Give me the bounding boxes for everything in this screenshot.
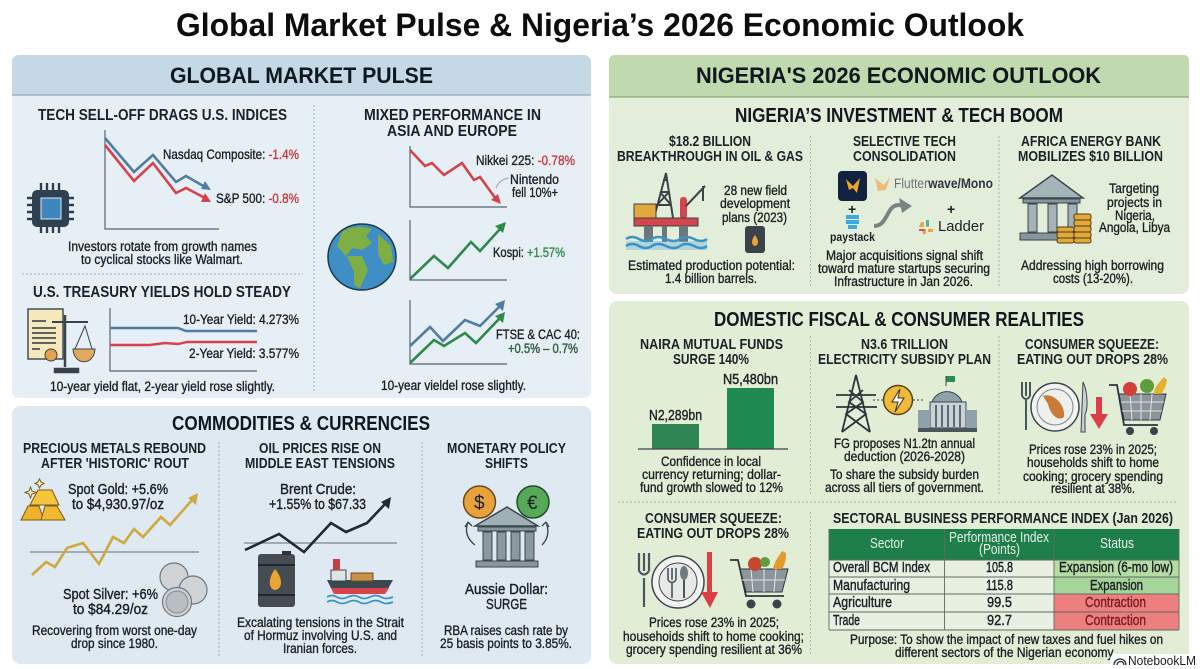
icon: plate, arrow and cart bottom bbox=[639, 551, 788, 608]
line chart: gold and silver bbox=[30, 493, 199, 575]
text: prices rose top: resilient at 38%. bbox=[1051, 481, 1135, 496]
text: fg proposes: deduction (2026-2028) bbox=[844, 449, 965, 464]
text: prices rose top: Prices rose 23% in 2025; bbox=[1029, 442, 1157, 457]
text: yield note: 10-year yield flat, 2-year yield rose slightly. bbox=[50, 379, 275, 394]
watermark: notebooklm: NotebookLM bbox=[1128, 653, 1196, 668]
icon: small barrel bbox=[745, 226, 765, 253]
label: aussie dollar bbox=[465, 581, 548, 613]
label: 2-year yield: 2-Year Yield: 3.577% bbox=[189, 345, 299, 361]
label: spot silver bbox=[63, 586, 158, 618]
line chart: nikkei bbox=[410, 146, 509, 207]
heading: tech consolidation: SELECTIVE TECH bbox=[853, 134, 956, 150]
label: spot gold: to $4,930.97/oz bbox=[72, 496, 164, 513]
icon: bank with coins bbox=[1020, 175, 1091, 243]
label: kospi: Kospi: +1.57% bbox=[493, 244, 565, 260]
text: fg proposes: FG proposes N1.2tn annual bbox=[834, 436, 975, 451]
label: brent crude bbox=[269, 481, 366, 513]
icon: plate, arrow and cart top bbox=[1022, 377, 1167, 435]
icon: bank with currency coins bbox=[464, 486, 549, 567]
nigeria outlook header: NIGERIA'S 2026 ECONOMIC OUTLOOK bbox=[696, 63, 1101, 88]
logos: fintech acquisitions: Flutterwave/Mono bbox=[894, 176, 993, 191]
heading: naira mutual funds bbox=[640, 337, 783, 368]
table: sectoral business performance: Performance Index bbox=[949, 530, 1050, 546]
text: targeting: projects in bbox=[1107, 195, 1162, 210]
text: fg proposes: across all tiers of government. bbox=[825, 480, 984, 495]
label: nintendo: fell 10%+ bbox=[512, 185, 558, 200]
label: spot gold: Spot Gold: +5.6% bbox=[68, 481, 168, 498]
text: rba: 25 basis points to 3.85%. bbox=[440, 636, 572, 651]
text: field plans: development bbox=[720, 196, 790, 211]
logos: fintech acquisitions bbox=[830, 171, 993, 244]
bar chart: naira funds: N5,480bn bbox=[723, 372, 778, 388]
text: fg proposes: To share the subsidy burden bbox=[830, 467, 979, 482]
global market pulse header bbox=[12, 55, 591, 95]
heading: precious metals: AFTER 'HISTORIC' ROUT bbox=[41, 456, 189, 472]
icon: oil rig bbox=[626, 173, 707, 250]
heading: africa energy bank: MOBILIZES $10 BILLION bbox=[1018, 149, 1163, 165]
heading: electricity subsidy: ELECTRICITY SUBSIDY PLAN bbox=[818, 352, 991, 368]
text: recovering: Recovering from worst one-day bbox=[32, 623, 197, 638]
heading: treasury yields: U.S. TREASURY YIELDS HOLD STEADY bbox=[33, 284, 291, 301]
heading: electricity subsidy: N3.6 TRILLION bbox=[861, 337, 948, 353]
text: prices rose bottom: Prices rose 23% in 2025; bbox=[649, 615, 779, 630]
icon: oil barrel bbox=[258, 551, 295, 607]
text: production potential: Estimated production potential: bbox=[628, 258, 795, 273]
label: nikkei: Nikkei 225: -0.78% bbox=[476, 152, 575, 168]
text: investors rotate: Investors rotate from growth names bbox=[68, 239, 257, 254]
table: sectoral business performance: 92.7 bbox=[987, 613, 1012, 629]
panel: commodities and currencies bbox=[12, 406, 591, 664]
heading: electricity subsidy bbox=[818, 337, 991, 368]
table: sectoral business performance: Manufacturing bbox=[833, 578, 910, 594]
text: acquisitions: Major acquisitions signal shift bbox=[826, 248, 983, 263]
heading: mixed performance: ASIA AND EUROPE bbox=[387, 123, 517, 140]
text: fg proposes bbox=[825, 436, 984, 495]
bar chart: naira funds: N2,289bn bbox=[649, 408, 702, 424]
text: strait of hormuz bbox=[237, 615, 404, 656]
icon: document and scales bbox=[28, 309, 95, 372]
icon: pylon, bolt and capitol bbox=[836, 375, 977, 432]
line chart: us indices bbox=[105, 130, 219, 229]
heading: monetary policy bbox=[447, 441, 566, 472]
text: borrowing costs bbox=[1021, 258, 1164, 286]
heading: investment and tech boom: NIGERIA’S INVESTMENT & TECH BOOM bbox=[735, 105, 1063, 127]
table: sectoral business performance: Agriculture bbox=[833, 595, 892, 611]
text: rba bbox=[440, 623, 572, 651]
text: confidence bbox=[640, 454, 783, 495]
text: investors rotate bbox=[68, 239, 257, 267]
heading: mixed performance: MIXED PERFORMANCE IN bbox=[364, 107, 541, 124]
table: sectoral business performance: Expansion (6-mo low) bbox=[1059, 560, 1173, 576]
heading: tech sell-off: TECH SELL-OFF DRAGS U.S. INDICES bbox=[38, 107, 287, 124]
panel: domestic fiscal and consumer realities bbox=[609, 301, 1189, 664]
table: sectoral business performance: Trade bbox=[833, 613, 860, 629]
heading: precious metals: PRECIOUS METALS REBOUND bbox=[23, 441, 206, 457]
label: aussie dollar: SURGE bbox=[486, 596, 527, 613]
table: sectoral business performance: 115.8 bbox=[986, 578, 1013, 594]
heading: naira mutual funds: NAIRA MUTUAL FUNDS bbox=[640, 337, 783, 353]
heading: naira mutual funds: SURGE 140% bbox=[673, 352, 749, 368]
label: s&p 500: S&P 500: -0.8% bbox=[216, 190, 299, 206]
label: brent crude: +1.55% to $67.33 bbox=[269, 496, 366, 513]
text: purpose: different sectors of the Nigerian economy. bbox=[895, 645, 1116, 660]
text: strait of hormuz: Excalating tensions in the Strait bbox=[237, 615, 404, 630]
text: prices rose top: cooking; grocery spending bbox=[1023, 469, 1163, 484]
heading: oil and gas: BREAKTHROUGH IN OIL & GAS bbox=[617, 149, 803, 165]
text: confidence: Confidence in local bbox=[661, 454, 761, 469]
heading: oil prices: OIL PRICES RISE ON bbox=[259, 441, 381, 457]
heading: consumer squeeze bottom: CONSUMER SQUEEZE: bbox=[645, 511, 782, 527]
text: targeting: Angola, Libya bbox=[1099, 220, 1170, 235]
heading: africa energy bank bbox=[1018, 134, 1163, 165]
text: acquisitions: toward mature startups securing bbox=[818, 261, 990, 276]
text: field plans: plans (2023) bbox=[722, 210, 787, 225]
bar chart: naira funds bbox=[638, 372, 788, 449]
table: sectoral business performance: 99.5 bbox=[987, 595, 1012, 611]
text: borrowing costs: Addressing high borrowing bbox=[1021, 258, 1164, 273]
heading: precious metals bbox=[23, 441, 206, 472]
table: sectoral business performance: Contraction bbox=[1085, 613, 1146, 629]
label: ftse and cac bbox=[496, 327, 580, 356]
heading: mixed performance bbox=[364, 107, 541, 140]
table: sectoral business performance: 105.8 bbox=[986, 560, 1013, 576]
text: production potential bbox=[628, 258, 795, 286]
panel: nigeria investment and tech boom bbox=[609, 55, 1189, 294]
label: nasdaq: Nasdaq Composite: -1.4% bbox=[163, 146, 299, 162]
text: investors rotate: to cyclical stocks like Walmart. bbox=[81, 252, 243, 267]
icon: microchip bbox=[27, 183, 74, 233]
text: prices rose bottom: grocery spending resilient at 36% bbox=[626, 642, 802, 657]
heading: oil and gas bbox=[617, 134, 803, 165]
panel: global market pulse bbox=[12, 55, 591, 398]
text: vieldel note: 10-year vieldel rose slightly. bbox=[381, 378, 526, 393]
heading: africa energy bank: AFRICA ENERGY BANK bbox=[1021, 134, 1161, 150]
label: spot gold bbox=[68, 481, 168, 513]
heading: oil prices: MIDDLE EAST TENSIONS bbox=[245, 456, 395, 472]
table: sectoral business performance: Contraction bbox=[1085, 595, 1146, 611]
label: nintendo: Nintendo bbox=[510, 172, 559, 187]
logos: fintech acquisitions: + bbox=[848, 201, 856, 217]
table: sectoral business performance: (Points) bbox=[979, 542, 1020, 558]
text: purpose: Purpose: To show the impact of new taxes and fuel hikes on bbox=[850, 632, 1163, 647]
heading: tech consolidation bbox=[853, 134, 956, 165]
heading: commodities: COMMODITIES & CURRENCIES bbox=[172, 413, 430, 435]
text: production potential: 1.4 billion barrels. bbox=[665, 271, 757, 286]
text: prices rose bottom bbox=[623, 615, 804, 657]
label: nintendo bbox=[510, 172, 559, 200]
table: sectoral business performance: Expansion bbox=[1090, 578, 1143, 594]
heading: consumer squeeze top bbox=[1017, 337, 1168, 368]
line chart: brent bbox=[244, 497, 397, 552]
text: recovering: drop since 1980. bbox=[71, 636, 158, 651]
label: spot silver: Spot Silver: +6% bbox=[63, 586, 158, 603]
heading: oil prices bbox=[245, 441, 395, 472]
text: purpose bbox=[850, 632, 1163, 660]
text: recovering bbox=[32, 623, 197, 651]
text: prices rose top: households shift to home bbox=[1027, 455, 1159, 470]
text: confidence: currency returning; dollar- bbox=[642, 467, 781, 482]
text: field plans bbox=[720, 183, 790, 225]
logos: fintech acquisitions: Ladder bbox=[938, 218, 984, 235]
icon: globe bbox=[328, 224, 396, 290]
text: acquisitions bbox=[818, 248, 990, 289]
icon: gold bars bbox=[21, 479, 65, 520]
label: brent crude: Brent Crude: bbox=[280, 481, 356, 498]
heading: monetary policy: SHIFTS bbox=[485, 456, 528, 472]
label: 10-year yield: 10-Year Yield: 4.273% bbox=[183, 311, 299, 327]
text: strait of hormuz: Iranian forces. bbox=[283, 641, 357, 656]
label: ftse and cac: FTSE & CAC 40: bbox=[496, 327, 580, 342]
heading: monetary policy: MONETARY POLICY bbox=[447, 441, 566, 457]
text: prices rose top bbox=[1023, 442, 1163, 496]
icon: bank with currency coins: $ bbox=[474, 493, 485, 514]
text: targeting: Nigeria, bbox=[1115, 208, 1155, 223]
heading: consumer squeeze top: EATING OUT DROPS 28% bbox=[1017, 352, 1168, 368]
logos: fintech acquisitions: paystack bbox=[830, 230, 875, 244]
text: confidence: fund growth slowed to 12% bbox=[640, 480, 783, 495]
label: spot silver: to $84.29/oz bbox=[73, 601, 148, 618]
icon: bank with currency coins: € bbox=[527, 493, 538, 514]
text: prices rose bottom: househoids shift to home cooking; bbox=[623, 629, 804, 644]
icon: silver coins bbox=[160, 563, 207, 616]
line chart: treasury yields bbox=[110, 308, 257, 371]
heading: consumer squeeze bottom bbox=[637, 511, 789, 542]
text: field plans: 28 new field bbox=[724, 183, 787, 198]
text: targeting: Targeting bbox=[1109, 181, 1159, 196]
text: rba: RBA raises cash rate by bbox=[444, 623, 568, 638]
global market pulse header: GLOBAL MARKET PULSE bbox=[170, 63, 433, 88]
heading: oil and gas: $18.2 BILLION bbox=[669, 134, 751, 150]
text: borrowing costs: costs (13-20%). bbox=[1053, 271, 1133, 286]
icon: tanker ship bbox=[327, 559, 393, 604]
table: sectoral business performance: Status bbox=[1100, 536, 1134, 552]
table: sectoral business performance bbox=[829, 529, 1179, 630]
text: targeting bbox=[1099, 181, 1170, 235]
text: strait of hormuz: of Hormuz involving U.S. and bbox=[244, 628, 397, 643]
label: ftse and cac: +0.5% – 0.7% bbox=[508, 341, 578, 356]
table: sectoral business performance: Sector bbox=[870, 536, 904, 552]
heading: consumer squeeze top: CONSUMER SQUEEZE: bbox=[1025, 337, 1159, 353]
line chart: kospi bbox=[410, 220, 507, 280]
logos: fintech acquisitions: + bbox=[947, 201, 955, 217]
nigeria outlook header bbox=[609, 55, 1189, 97]
text: acquisitions: Infrastructure in Jan 2026. bbox=[834, 274, 973, 289]
line chart: ftse and cac bbox=[410, 300, 507, 364]
label: aussie dollar: Aussie Dollar: bbox=[465, 581, 548, 598]
heading: domestic fiscal: DOMESTIC FISCAL & CONSUMER REALITIES bbox=[714, 309, 1084, 331]
heading: consumer squeeze bottom: EATING OUT DROPS 28% bbox=[637, 526, 789, 542]
heading: tech consolidation: CONSOLIDATION bbox=[853, 149, 956, 165]
table: sectoral business performance: Overall BCM Index bbox=[833, 560, 931, 576]
title: Global Market Pulse & Nigeria’s 2026 Economic Outlook bbox=[176, 7, 1024, 43]
